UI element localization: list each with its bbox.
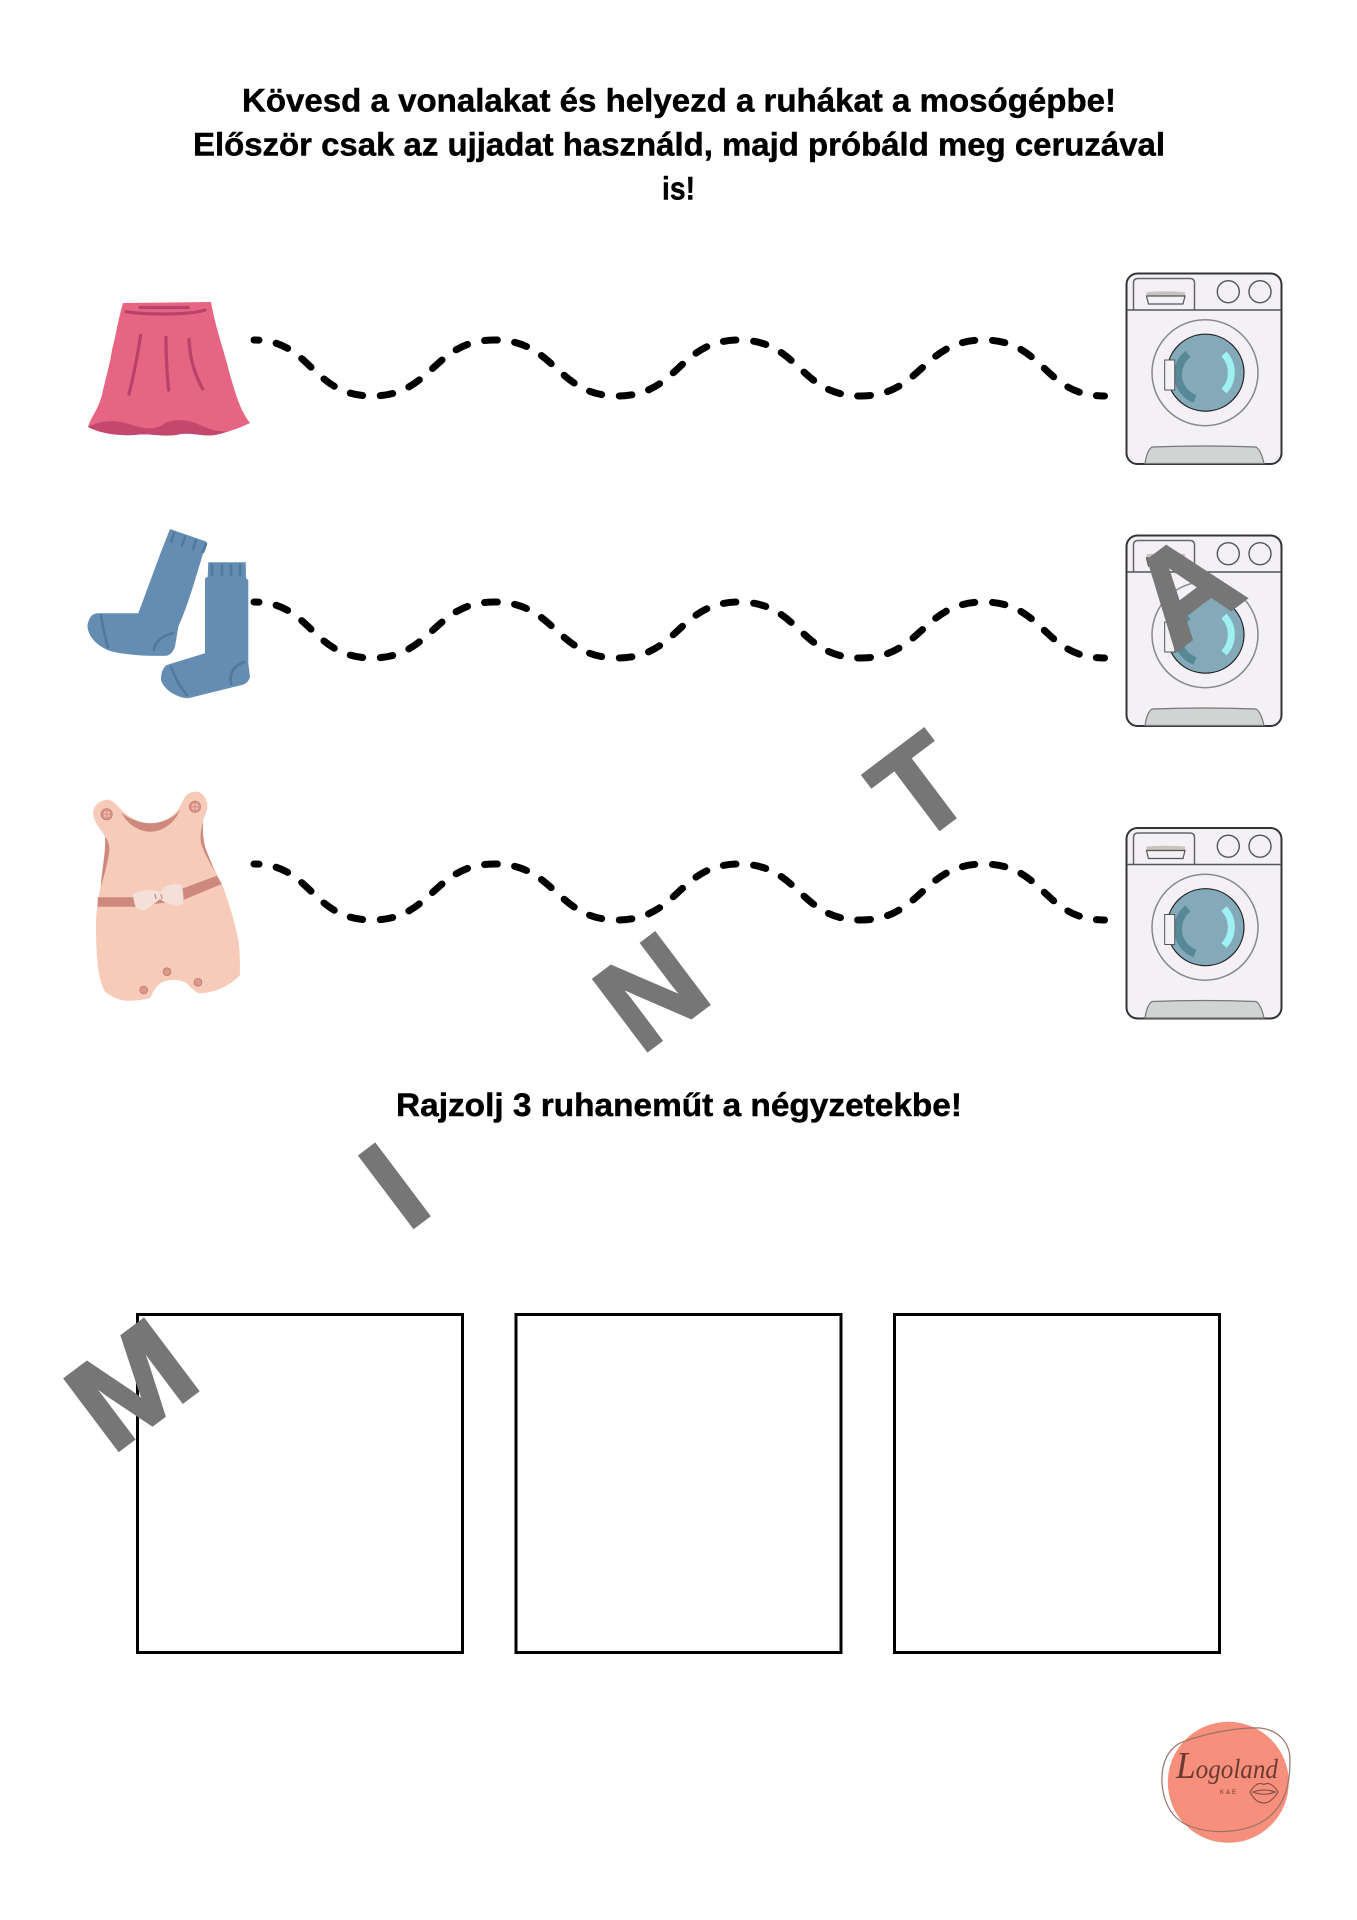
drawing box 3 (894, 1314, 1220, 1652)
title: Kövesd a vonalakat és helyezd a ruhákat a mosógépbe! (242, 82, 1116, 118)
watermark: MINTA (41, 502, 1266, 1478)
icon: skirt (88, 302, 250, 436)
watermark: MINTA: A (1103, 502, 1266, 675)
logo: Logoland: Logoland (1175, 1745, 1278, 1787)
watermark: MINTA: M (41, 1292, 222, 1478)
title (193, 82, 1165, 206)
dashed path 3 (254, 864, 1104, 920)
logo: Logoland: K&E (1220, 1790, 1236, 1796)
dashed path 2 (254, 602, 1104, 658)
watermark: MINTA: I (336, 1116, 453, 1255)
watermark: MINTA: T (845, 705, 996, 870)
logo: Logoland (1162, 1722, 1290, 1843)
icon: baby romper (93, 792, 240, 1001)
heading: draw clothes: Rajzolj 3 ruhaneműt a négyzetekbe! (396, 1087, 962, 1123)
icon: socks (87, 529, 250, 698)
title: is! (662, 170, 695, 206)
drawing box 2 (516, 1314, 841, 1652)
drawing box 1 (138, 1314, 462, 1652)
washing machine 2 (1126, 536, 1282, 726)
washing machine 3 (1126, 828, 1282, 1018)
washing machine 1 (1126, 274, 1282, 464)
dashed path 1 (254, 340, 1104, 396)
watermark: MINTA: N (570, 905, 733, 1078)
title: Először csak az ujjadat használd, majd próbáld meg ceruzával (193, 126, 1165, 162)
